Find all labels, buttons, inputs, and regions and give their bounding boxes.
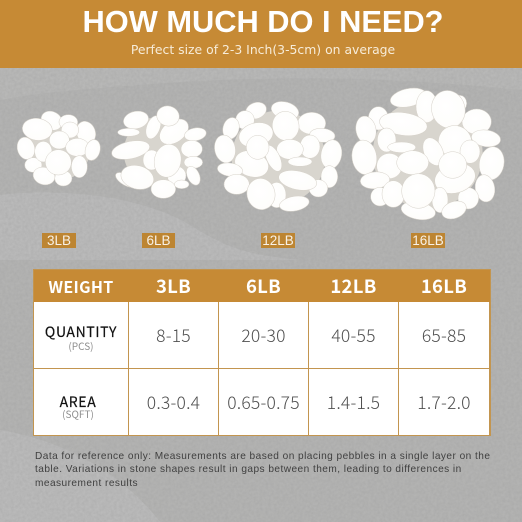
footnote: table. Variations in stone shapes result in gaps between them, leading to differences in [35, 464, 462, 475]
label: 16LB: 16LB [412, 233, 444, 248]
table frame [33, 269, 491, 436]
header: 3LB: 3LB [156, 273, 191, 299]
pebble pile: 12LB [212, 99, 344, 213]
pebble pile: 3LB [15, 107, 103, 187]
row label: quantity: QUANTITY [45, 322, 117, 342]
title: HOW MUCH DO I NEED? [82, 4, 444, 39]
subtitle: Perfect size of 2-3 Inch(3-5cm) on average [131, 42, 395, 57]
value: 3LB quantity: 8-15 [156, 323, 191, 348]
header band [0, 0, 522, 68]
table header band [34, 270, 490, 302]
value: 16LB quantity [399, 302, 489, 368]
value: 16LB area: 1.7-2.0 [417, 390, 471, 415]
value: 16LB quantity: 65-85 [422, 323, 466, 348]
value: 12LB quantity [309, 302, 398, 368]
value: 6LB quantity [219, 302, 308, 368]
comparison table [33, 269, 491, 436]
header: 12LB: 12LB [330, 273, 377, 299]
label: 12LB: 12LB [262, 233, 294, 248]
value: 16LB area [399, 369, 489, 435]
pebble pile: 6LB [110, 103, 207, 198]
value: 3LB area [129, 369, 218, 435]
row label: area: AREA [60, 392, 96, 412]
label: 3LB: 3LB [47, 233, 71, 248]
header: WEIGHT: WEIGHT [48, 274, 114, 298]
value: 6LB area: 0.65-0.75 [227, 390, 300, 415]
row label: area [34, 369, 128, 435]
footnote: Data for reference only: Measurements are based on placing pebbles in a single layer on the [35, 451, 490, 462]
row label: quantity: (PCS) [68, 338, 94, 353]
pebble pile: 16LB [350, 85, 507, 222]
header: 6LB: 6LB [246, 273, 281, 299]
value: 12LB quantity: 40-55 [331, 323, 376, 348]
row label: area: (SQFT) [62, 406, 94, 421]
value: 12LB area [309, 369, 398, 435]
footnote [35, 451, 490, 489]
footnote: measurement results [35, 478, 138, 489]
header: 16LB: 16LB [421, 273, 467, 299]
label: 6LB: 6LB [146, 233, 171, 248]
value: 6LB area [219, 369, 308, 435]
value: 3LB area: 0.3-0.4 [147, 390, 200, 415]
pebble clusters [17, 88, 504, 220]
value: 3LB quantity [129, 302, 218, 368]
value: 12LB area: 1.4-1.5 [327, 390, 380, 415]
value: 6LB quantity: 20-30 [241, 323, 286, 348]
row label: quantity [34, 302, 128, 368]
